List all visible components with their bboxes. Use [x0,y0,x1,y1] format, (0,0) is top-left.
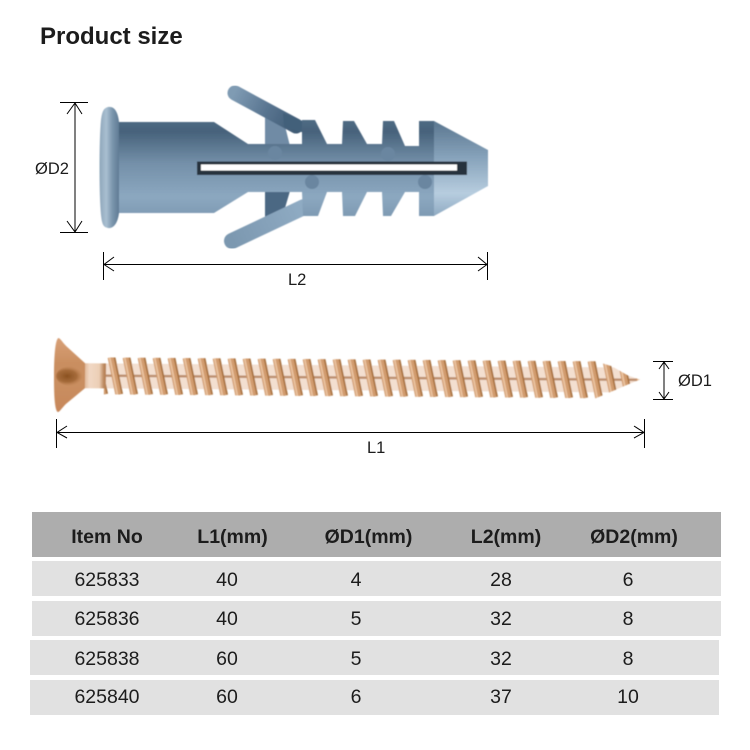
row: 625833: 625833 [74,569,140,591]
screw shank with threads [104,357,640,399]
row: 625840 [30,680,719,715]
title: Product size [40,23,183,50]
table: product sizes [30,512,721,715]
row: 625838: 60 [216,648,238,670]
table header: L1(mm) [197,526,268,548]
row: 625836: 5 [351,608,362,630]
row: 625838 [30,640,719,675]
row: 625840: 10 [617,686,639,708]
dimension: D2 [60,102,88,232]
label: D1: ØD1 [678,372,712,390]
row: 625836: 40 [216,608,238,630]
row: 625838: 32 [490,648,512,670]
dimension: D1 [653,362,673,400]
anchor flange [100,107,119,228]
label: L2: L2 [288,271,306,289]
anchor nose cone [434,121,488,216]
row: 625838: 625838 [74,648,140,670]
anchor slot [197,162,467,175]
screw neck [80,363,106,388]
dimension: L2 [104,252,488,280]
table header: Item No [71,526,143,548]
row: 625836: 32 [490,608,512,630]
row: 625833: 6 [623,569,633,591]
row: 625833: 28 [490,569,512,591]
screw head recess [56,366,88,386]
table header: ØD1(mm) [325,526,412,548]
row: 625838: 8 [623,648,633,670]
row: 625838: 5 [351,648,362,670]
anchor body with fins [118,120,434,216]
illustration: plastic wall anchor [100,93,488,241]
anchor rivet bumps [268,146,432,189]
row: 625836: 625836 [74,608,140,630]
row: 625833: 4 [351,569,362,591]
row: 625833: 40 [216,569,238,591]
table header [32,512,721,557]
row: 625840: 37 [490,686,512,708]
row: 625836 [32,601,721,636]
row: 625840: 625840 [74,686,140,708]
illustration: screw [54,338,640,417]
dimension: L1 [56,419,644,448]
upper wing [235,93,305,146]
row: 625840: 60 [216,686,238,708]
label: D2: ØD2 [35,160,69,178]
table header: ØD2(mm) [590,526,678,548]
row: 625833 [32,561,721,596]
row: 625840: 6 [351,686,361,708]
table header: L2(mm) [471,526,541,548]
label: L1: L1 [367,439,385,457]
lower wing [232,191,304,241]
screw head [54,338,85,412]
row: 625836: 8 [623,608,633,630]
